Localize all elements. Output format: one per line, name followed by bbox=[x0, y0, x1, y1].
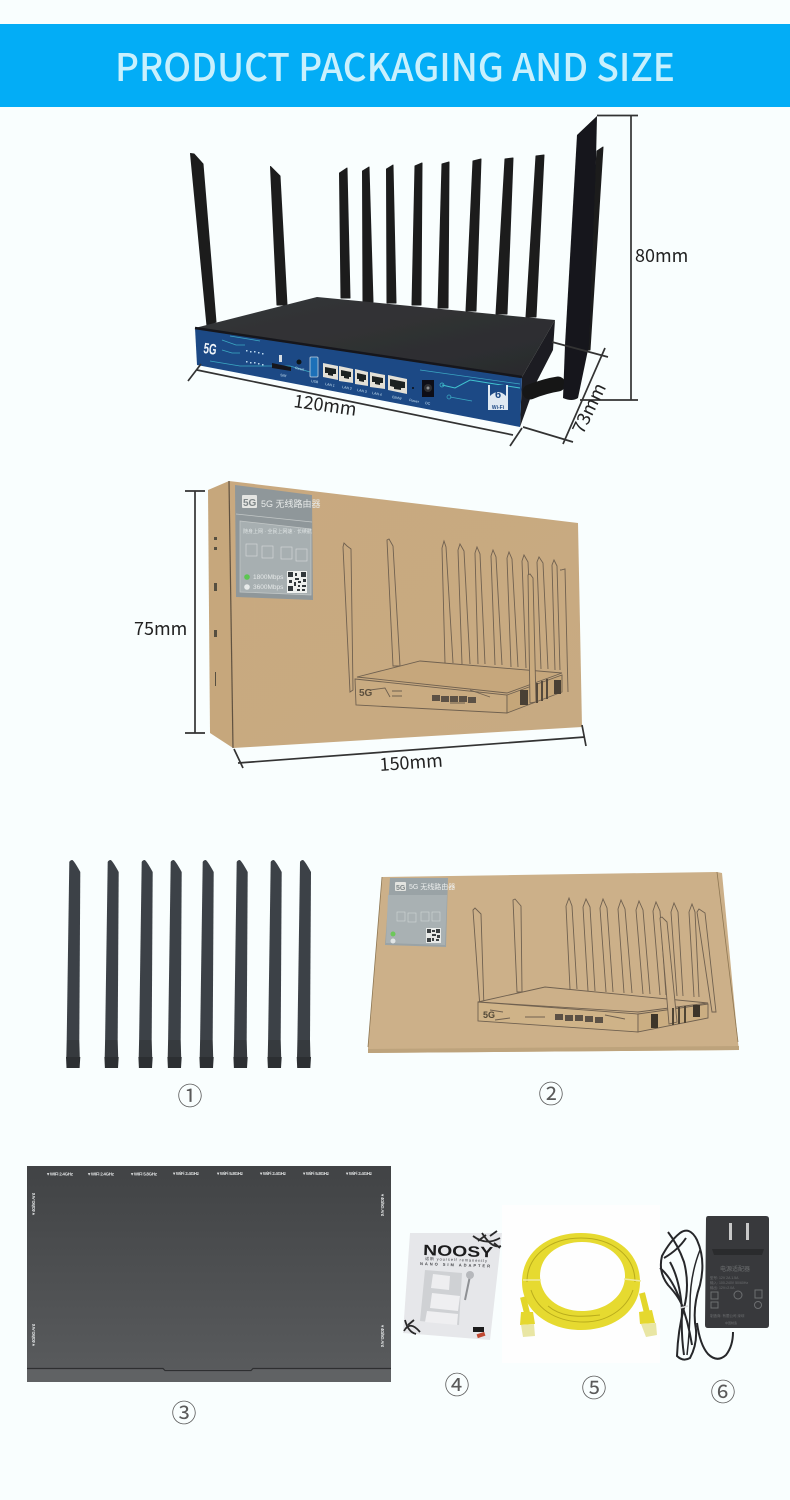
box face bbox=[229, 481, 582, 748]
circuit traces bbox=[210, 336, 520, 401]
logo 5G: 5G bbox=[202, 340, 218, 359]
connectors bbox=[520, 1312, 535, 1325]
port labels bbox=[280, 366, 431, 406]
adapter body bbox=[705, 1216, 769, 1328]
plug pins bbox=[729, 1223, 732, 1240]
retail box bbox=[208, 481, 582, 748]
dimension: 75mm height: 75mm bbox=[134, 615, 187, 641]
port labels: USB bbox=[311, 379, 319, 384]
box mini router details: 5G bbox=[359, 688, 373, 699]
cable coil bbox=[522, 1233, 640, 1330]
adapter markings: 输出: 12V=2.0A bbox=[710, 1285, 735, 1290]
wifi 6 logo bbox=[488, 385, 508, 411]
item 6: power adapter bbox=[660, 1216, 769, 1360]
box 2 mini router details: 5G bbox=[483, 1010, 495, 1020]
box label: 3600Mbps bbox=[253, 584, 284, 591]
number 2: ② bbox=[538, 1075, 564, 1111]
number 6: ⑥ bbox=[710, 1373, 736, 1409]
power LED bbox=[412, 387, 414, 389]
port labels: LAN 2 bbox=[342, 385, 352, 391]
number 5: ⑤ bbox=[581, 1369, 607, 1405]
box mini router details bbox=[359, 679, 561, 705]
dimension: 150mm width bbox=[234, 725, 586, 777]
port labels: LAN 3 bbox=[357, 388, 367, 394]
cable boots bbox=[523, 1293, 647, 1317]
box label bbox=[235, 485, 321, 600]
panel labels: ▾ 4G/5G Ant bbox=[380, 1324, 385, 1348]
rear antennas bbox=[190, 147, 603, 350]
box line drawing bbox=[343, 539, 568, 713]
panel labels: ▾ WiFi 2.4GHz bbox=[172, 1171, 200, 1176]
panel labels: ▾ WiFi 2.4GHz bbox=[46, 1172, 74, 1176]
panel labels: ▾ WiFi 2.4GHz bbox=[87, 1172, 115, 1176]
port labels: LAN 4 bbox=[372, 391, 382, 397]
spine marks bbox=[214, 537, 217, 686]
dimension: 80mm height: 80mm bbox=[635, 242, 688, 268]
USB port bbox=[310, 357, 318, 377]
QR code bbox=[287, 571, 307, 593]
adapter cut-outs bbox=[420, 1270, 462, 1325]
box label: 5G bbox=[243, 498, 257, 509]
router top plate bbox=[195, 297, 555, 377]
box body bbox=[368, 872, 739, 1053]
dimension: 80mm height bbox=[580, 116, 688, 400]
floral corners bbox=[473, 1231, 501, 1248]
panel labels: ▾ 4G/5G Ant bbox=[380, 1193, 385, 1216]
cord bbox=[660, 1231, 733, 1360]
router right side bbox=[520, 320, 555, 427]
router photo bbox=[190, 116, 603, 427]
status LEDs bbox=[246, 350, 264, 366]
side antenna stub bbox=[530, 384, 558, 392]
box 2 label: 5G bbox=[396, 885, 406, 892]
banner bbox=[0, 24, 790, 107]
wifi 6 logo: 6 bbox=[495, 389, 501, 401]
dimension: 150mm width: 150mm bbox=[379, 747, 444, 777]
item 2: boxed router bbox=[368, 872, 739, 1053]
box 2 label: 5G 无线路由器 bbox=[409, 882, 455, 891]
item 4: SIM adapter pack: NANO SIM ADAPTER bbox=[420, 1261, 490, 1268]
LAN ports bbox=[323, 363, 407, 394]
box label: 随身上网 · 全民上网速 · 长续航 bbox=[243, 528, 312, 535]
box 2 mini router details bbox=[483, 1005, 700, 1028]
port labels: Power bbox=[409, 398, 420, 404]
port labels: DC bbox=[425, 401, 431, 406]
dimension: 73mm depth bbox=[523, 342, 612, 444]
port labels: Reset bbox=[295, 366, 305, 372]
box 2 label bbox=[385, 878, 455, 947]
port labels: SIM bbox=[280, 373, 287, 378]
box label: 1800Mbps bbox=[253, 574, 284, 581]
item 1: eight antennas bbox=[66, 860, 311, 1068]
panel labels: ▾ WiFi 5.8GHz bbox=[130, 1172, 158, 1176]
adapter markings: 制造商: 有限公司 深圳 bbox=[710, 1313, 745, 1318]
SIM slot bbox=[272, 363, 291, 371]
number 1: ① bbox=[177, 1077, 203, 1113]
item 5: yellow ethernet cable bbox=[502, 1205, 660, 1363]
panel labels: ▾ WiFi 2.4GHz bbox=[345, 1171, 373, 1176]
panel labels: ▾ WiFi 2.4GHz bbox=[259, 1171, 287, 1176]
item 4: SIM adapter pack: NOOSY bbox=[423, 1242, 493, 1261]
dimension: 73mm depth: 73mm bbox=[565, 378, 612, 438]
item 3: black panel bbox=[27, 1166, 391, 1382]
port labels: Eth/W bbox=[392, 395, 403, 401]
adapter markings: 型号: 12V 2A 1.5A bbox=[710, 1275, 739, 1280]
title: PRODUCT PACKAGING AND SIZE bbox=[115, 37, 675, 92]
panel labels: ▾ WiFi 5.8GHz bbox=[216, 1171, 244, 1176]
panel labels: ▾ WiFi 5.8GHz bbox=[302, 1171, 330, 1176]
box spine bbox=[208, 481, 233, 748]
indicator bbox=[279, 355, 282, 362]
large front antenna bbox=[563, 116, 597, 400]
number 3: ③ bbox=[171, 1394, 197, 1430]
DC jack bbox=[422, 380, 434, 397]
dimension: 120mm width: 120mm bbox=[292, 387, 358, 422]
wifi 6 logo: Wi-Fi bbox=[492, 405, 505, 411]
item 4: SIM adapter pack: 诺斯 yourself remanently bbox=[425, 1255, 487, 1263]
adapter markings: 中国制造 bbox=[725, 1320, 737, 1325]
adapter markings bbox=[710, 1265, 762, 1325]
port labels: LAN 1 bbox=[325, 382, 335, 388]
adapter markings: 电源适配器 bbox=[720, 1265, 750, 1273]
dimension: 120mm width bbox=[188, 364, 522, 446]
panel labels: ▾ 4G/5G Ant bbox=[31, 1192, 36, 1216]
panel labels: ▾ 4G/5G Ant bbox=[31, 1324, 36, 1347]
adapter markings: 输入: 100-240V 50/60Hz bbox=[710, 1280, 748, 1285]
number 4: ④ bbox=[444, 1366, 470, 1402]
item 4: SIM adapter pack bbox=[403, 1231, 502, 1340]
panel labels bbox=[31, 1171, 385, 1348]
box 2 line drawing bbox=[473, 898, 716, 1032]
dimension: 75mm height bbox=[134, 491, 205, 733]
router front panel bbox=[195, 328, 522, 427]
box label: 5G 无线路由器 bbox=[261, 498, 321, 509]
